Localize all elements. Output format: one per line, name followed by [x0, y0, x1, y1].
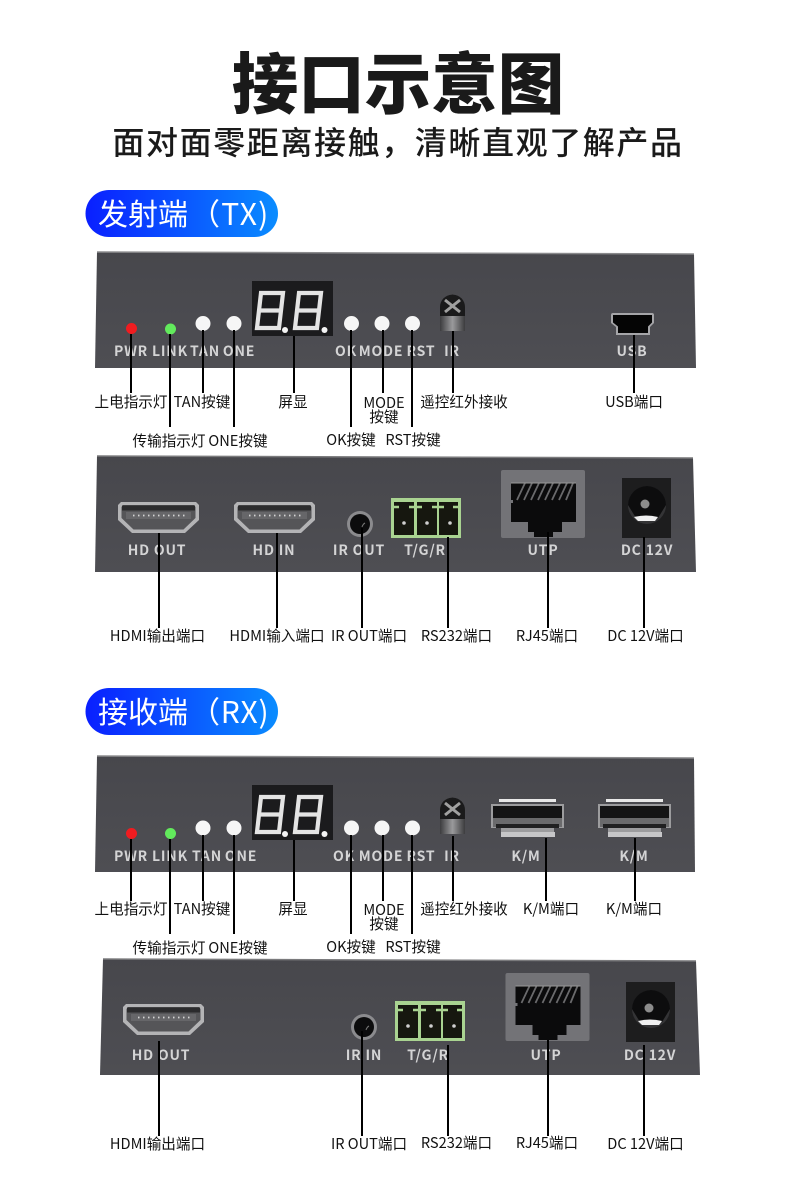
labels: RX front: RST按键	[385, 936, 441, 957]
panel port names: OK	[335, 341, 357, 361]
panel port names: IR	[444, 341, 460, 361]
section heading: transmitter: 发射端	[98, 190, 188, 234]
button: MODE	[374, 820, 390, 836]
labels: RX front: 传输指示灯	[133, 937, 206, 958]
port: K/M USB 1	[491, 799, 564, 837]
labels: TX front: 按键	[369, 406, 399, 427]
labels: TX front: USB端口	[605, 391, 663, 412]
panel port names: HD IN	[253, 540, 295, 560]
panel: RX front	[95, 756, 695, 872]
panel port names: UTP	[528, 540, 558, 560]
labels: TX rear: HDMI输入端口	[229, 625, 325, 646]
panel port names: DC 12V	[624, 1045, 676, 1065]
labels: RX front: ONE按键	[208, 937, 268, 958]
panel port names: IR IN	[346, 1045, 382, 1065]
labels: TX front: ONE按键	[208, 430, 268, 451]
port: HDMI output	[118, 502, 199, 533]
section heading: receiver	[86, 688, 278, 735]
panel port names: IR	[444, 846, 460, 866]
panel port names: IR OUT	[333, 540, 385, 560]
button: RST	[405, 316, 420, 331]
panel: RX rear	[100, 959, 700, 1075]
leader lines: TX rear	[159, 528, 644, 628]
labels: RX front: 按键	[369, 913, 399, 934]
section heading: receiver: 接收端	[98, 688, 188, 732]
section heading: transmitter: （TX)	[190, 190, 269, 234]
panel port names: MODE	[359, 846, 403, 866]
labels: RX front	[95, 898, 662, 958]
port: RJ45	[501, 470, 585, 538]
labels: RX front: OK按键	[326, 936, 376, 957]
panel port names: UTP	[531, 1045, 561, 1065]
section heading: receiver: （RX)	[190, 688, 269, 732]
panel port names: K/M	[511, 846, 541, 866]
section heading: transmitter	[86, 190, 278, 237]
panel: TX front	[95, 252, 696, 368]
labels: TX rear: IR OUT端口	[331, 625, 407, 646]
leader lines: TX front	[131, 330, 634, 427]
panel port names: PWR	[114, 341, 148, 361]
port: DC 12V	[622, 478, 671, 538]
labels: TX front: 遥控红外接收	[420, 391, 508, 412]
port: DC 12V	[626, 982, 675, 1042]
port: HDMI input	[234, 502, 315, 533]
subtitle: 面对面零距离接触，清晰直观了解产品	[112, 118, 684, 164]
labels: TX rear	[110, 625, 684, 646]
labels: TX front	[95, 391, 663, 451]
labels: TX front: 传输指示灯	[133, 430, 206, 451]
button: TAN	[196, 316, 210, 331]
labels: RX rear: HDMI输出端口	[110, 1133, 205, 1154]
labels: TX rear: DC 12V端口	[607, 625, 684, 646]
labels: TX rear: HDMI输出端口	[110, 625, 205, 646]
icon: IR receiver	[440, 294, 465, 331]
indicator: power LED	[126, 828, 137, 839]
indicator: power LED	[126, 323, 137, 334]
button: ONE	[226, 820, 242, 836]
labels: TX front: OK按键	[326, 429, 376, 450]
panel port names: TAN	[190, 341, 220, 361]
port: RS232 terminal	[391, 498, 461, 538]
panel port names: K/M	[619, 846, 649, 866]
LED display	[252, 281, 333, 336]
panel port names	[114, 846, 649, 866]
panel port names: ONE	[223, 341, 255, 361]
labels: RX front: 屏显	[278, 898, 308, 919]
panel port names: T/G/R	[407, 1045, 449, 1065]
panel port names: RST	[407, 341, 435, 361]
panel port names	[128, 540, 673, 560]
button: TAN	[196, 820, 210, 836]
panel port names: ONE	[225, 846, 257, 866]
panel port names: TAN	[192, 846, 222, 866]
labels: RX front: MODE	[363, 899, 405, 920]
panel port names: HD OUT	[132, 1045, 190, 1065]
labels: TX front: MODE	[363, 392, 405, 413]
indicator: link LED	[165, 324, 176, 334]
button: OK	[344, 316, 359, 331]
panel port names: LINK	[152, 846, 188, 866]
labels: TX front: 屏显	[278, 391, 308, 412]
labels: RX rear: RS232端口	[421, 1132, 492, 1153]
leader lines: RX front	[131, 835, 635, 934]
port: RS232 terminal	[395, 1001, 465, 1041]
panel port names: LINK	[152, 341, 188, 361]
labels: RX rear: DC 12V端口	[607, 1133, 684, 1154]
labels: RX front: 上电指示灯	[95, 898, 168, 919]
labels: RX front: 遥控红外接收	[420, 898, 508, 919]
port: mini USB	[611, 313, 654, 335]
button: OK	[344, 820, 359, 836]
panel port names: DC 12V	[621, 540, 673, 560]
labels: TX front: RST按键	[385, 429, 441, 450]
port: HDMI output	[123, 1004, 204, 1035]
panel port names: USB	[617, 341, 647, 361]
labels: TX rear: RJ45端口	[516, 625, 578, 646]
panel port names: OK	[333, 846, 355, 866]
leader lines: RX rear	[159, 1031, 644, 1136]
indicator: link LED	[165, 828, 176, 839]
panel port names: MODE	[359, 341, 403, 361]
button: MODE	[374, 316, 390, 331]
labels: TX front: 上电指示灯	[95, 391, 168, 412]
labels: RX rear: RJ45端口	[516, 1132, 578, 1153]
port: RJ45	[506, 973, 590, 1041]
labels: RX rear: IR OUT端口	[331, 1133, 407, 1154]
labels: RX front: K/M端口	[523, 898, 579, 919]
button: RST	[405, 820, 420, 836]
port: IR in jack	[351, 1014, 377, 1040]
labels: RX front: TAN按键	[174, 898, 231, 919]
button: ONE	[226, 316, 242, 331]
panel: TX rear	[95, 456, 696, 572]
labels: RX rear	[110, 1132, 684, 1154]
panel port names: T/G/R	[404, 540, 446, 560]
labels: TX front: TAN按键	[174, 391, 231, 412]
labels: TX rear: RS232端口	[421, 625, 492, 646]
panel port names: HD OUT	[128, 540, 186, 560]
port: IR out jack	[347, 511, 373, 537]
LED display	[252, 785, 333, 840]
panel port names	[132, 1045, 676, 1065]
panel port names: PWR	[114, 846, 148, 866]
icon: IR receiver	[440, 798, 465, 834]
labels: RX front: K/M端口	[606, 898, 662, 919]
title: 接口示意图	[232, 32, 564, 128]
panel port names: RST	[407, 846, 435, 866]
port: K/M USB 2	[598, 799, 671, 837]
panel port names	[114, 341, 647, 361]
